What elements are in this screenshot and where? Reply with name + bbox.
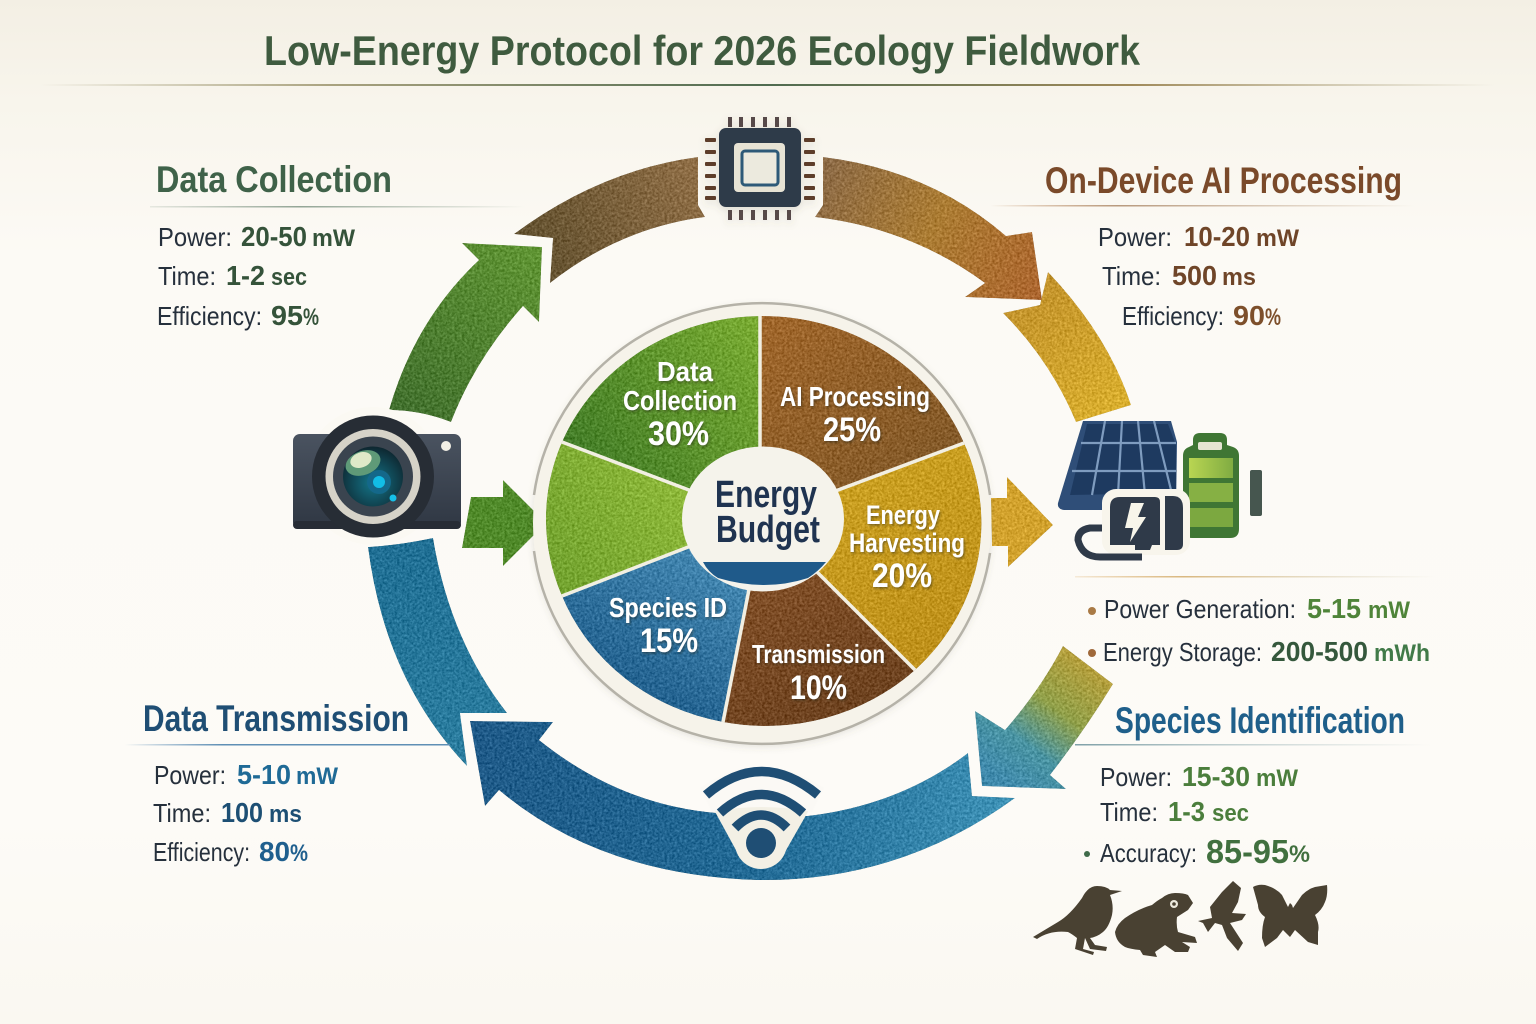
panel: energy harvesting stats: Power Generation:	[1104, 594, 1296, 624]
segment: AI processing	[760, 316, 964, 518]
panel: species identification: sec	[1212, 800, 1249, 827]
panel: species identification: mW	[1256, 765, 1298, 792]
pie: energy budget	[533, 303, 991, 744]
panel: energy harvesting stats: Energy Storage:	[1103, 637, 1262, 667]
center hub: Energy	[715, 474, 817, 516]
panel: species identification: 85-95	[1206, 833, 1289, 870]
panel: energy harvesting stats: mWh	[1374, 640, 1430, 667]
silhouette: bird	[1033, 886, 1122, 955]
icon: wifi	[700, 766, 824, 869]
pie: energy budget: Data	[657, 356, 713, 387]
panel: species identification: Time:	[1100, 797, 1158, 827]
panel: on-device AI processing: Efficiency:	[1122, 301, 1224, 331]
panel: data collection: %	[303, 304, 319, 331]
silhouette: small bird	[1198, 881, 1246, 951]
panel: data transmission: 80	[259, 836, 290, 867]
panel: data transmission: Efficiency:	[153, 837, 250, 867]
panel: data transmission: 100	[221, 797, 263, 828]
pie: energy budget: 30%	[648, 415, 709, 453]
panel: data transmission: mW	[296, 763, 338, 790]
pie: energy budget: 10%	[790, 669, 847, 707]
panel: on-device AI processing: Time:	[1102, 261, 1161, 291]
panel: data collection: sec	[271, 264, 307, 291]
panel: data transmission	[125, 698, 450, 867]
frog eye	[1170, 900, 1178, 908]
panel: on-device AI processing: ms	[1222, 264, 1256, 291]
panel: species identification: Power:	[1100, 762, 1172, 792]
arrow: transmission to camera	[368, 538, 507, 766]
segment: species ID	[562, 518, 763, 722]
panel: on-device AI processing: 500	[1172, 260, 1217, 291]
arrow: species identification to transmission	[470, 721, 1015, 880]
silhouette: frog	[1115, 893, 1197, 957]
panel: data collection: Power:	[158, 222, 232, 252]
pie: energy budget: Species ID	[609, 592, 727, 623]
silhouette: butterfly	[1253, 885, 1327, 947]
panel: data collection: 95	[271, 300, 303, 331]
pie: energy budget: Harvesting	[849, 528, 965, 558]
pie: energy budget: AI Processing	[780, 381, 930, 412]
arrow: energy to species identification	[975, 646, 1113, 789]
panel: on-device AI processing: On-Device AI Processing	[1045, 160, 1402, 201]
panel: species identification: %	[1289, 841, 1310, 868]
panel: data collection: 20-50	[241, 221, 307, 252]
panel: on-device AI processing: Power:	[1098, 222, 1172, 252]
pie: energy budget: Collection	[623, 385, 737, 416]
panel: species identification: 1-3	[1168, 796, 1205, 827]
panel: data collection: 1-2	[226, 260, 265, 291]
panel: data transmission: 5-10	[237, 759, 291, 790]
arrow: data collection to AI	[389, 243, 542, 422]
frog pupil	[1172, 902, 1176, 906]
solar panel	[1058, 421, 1177, 510]
panel: energy harvesting stats: mW	[1368, 597, 1410, 624]
icon: camera	[293, 407, 461, 545]
panel: on-device AI processing: %	[1265, 304, 1281, 331]
panel: energy harvesting stats: 200-500	[1271, 636, 1368, 667]
panel: data transmission: Power:	[154, 760, 226, 790]
panel: data transmission: Time:	[153, 798, 211, 828]
segment: data collection	[562, 316, 760, 518]
panel: data collection: mW	[312, 225, 355, 252]
pie: energy budget: Transmission	[752, 639, 885, 669]
panel: energy harvesting stats: 5-15	[1307, 593, 1361, 624]
panel: data transmission: Data Transmission	[143, 698, 409, 739]
pie: energy budget: 20%	[872, 557, 932, 595]
icon: solar panel, charger and battery	[1058, 421, 1262, 557]
panel: on-device AI processing	[990, 160, 1415, 331]
pie: energy budget: Energy	[866, 500, 940, 530]
arrow: AI processing inbound	[514, 157, 705, 283]
arrow: harvest inbound	[1003, 272, 1131, 422]
panel: on-device AI processing: 90	[1233, 300, 1265, 331]
panel: data collection: Efficiency:	[157, 301, 262, 331]
panel: data collection: Time:	[158, 261, 216, 291]
battery	[1183, 433, 1262, 538]
center hub: Budget	[716, 509, 820, 551]
panel: data collection: Data Collection	[156, 159, 392, 200]
segment: transmission	[723, 518, 915, 726]
panel: species identification: Accuracy:	[1100, 838, 1197, 868]
panel: species identification: 15-30	[1182, 761, 1250, 792]
panel: on-device AI processing: mW	[1256, 225, 1299, 252]
pie: energy budget: 15%	[640, 622, 698, 660]
icon: AI chip	[705, 117, 815, 220]
panel: species identification: Species Identification	[1115, 700, 1405, 741]
center hub	[682, 446, 844, 592]
pie: energy budget: 25%	[823, 411, 881, 449]
arrow: AI processing to energy	[815, 157, 1042, 300]
arrow: camera to pie	[462, 480, 546, 566]
segment: unlabelled light green	[546, 442, 763, 596]
icon: animal silhouettes	[1033, 881, 1327, 957]
panel: energy harvesting stats	[1075, 576, 1437, 667]
charger	[1078, 489, 1190, 557]
panel: data transmission: %	[290, 840, 308, 867]
panel: data transmission: ms	[269, 801, 302, 828]
panel: species identification	[1075, 700, 1430, 870]
title: Low-Energy Protocol for 2026 Ecology Fieldwork	[264, 27, 1141, 74]
segment: energy harvesting	[763, 443, 981, 670]
panel: on-device AI processing: 10-20	[1184, 221, 1250, 252]
panel: data collection	[150, 159, 525, 331]
arrow: pie to energy	[991, 477, 1053, 567]
